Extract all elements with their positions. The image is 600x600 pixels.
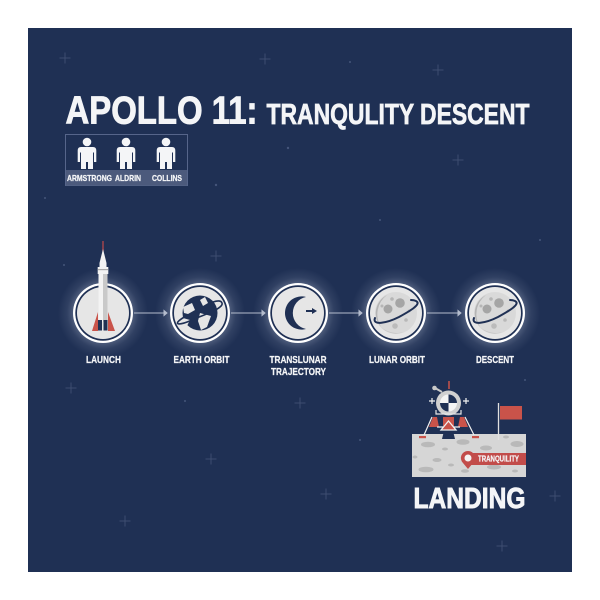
crew names: ARMSTRONG (67, 173, 112, 183)
crew names: ALDRIN (115, 173, 141, 183)
title: APOLLO 11: (66, 90, 258, 132)
title (66, 90, 530, 132)
arrow: earth orbit to translunar (231, 310, 265, 316)
step: lunar orbit (351, 268, 441, 366)
arrow: launch to earth orbit (134, 310, 167, 316)
step: translunar trajectory: TRAJECTORY (271, 366, 326, 378)
icon: astronaut Armstrong (78, 138, 96, 169)
step: descent (450, 268, 540, 366)
title: TRANQULITY DESCENT (266, 99, 530, 131)
icon: earth with orbit (177, 296, 222, 330)
label: EARTH ORBIT (174, 354, 230, 366)
step: launch (58, 241, 148, 366)
label: LAUNCH (86, 354, 121, 366)
icon: moon with orbit (474, 292, 517, 334)
label: TRANSLUNAR (270, 354, 327, 366)
icon: moon with orbit (375, 292, 418, 334)
label: DESCENT (476, 354, 514, 366)
arrow: lunar orbit to descent (427, 310, 461, 316)
label: LUNAR ORBIT (369, 354, 425, 366)
icon: astronaut Collins (157, 138, 175, 169)
landing scene (412, 381, 526, 515)
landing heading: LANDING (414, 483, 526, 515)
lunar surface (412, 434, 526, 477)
step: earth orbit (155, 268, 245, 366)
icon: astronaut Aldrin (117, 138, 135, 169)
icon: flag (498, 403, 522, 440)
icon: lunar module (419, 381, 479, 439)
crew names (67, 173, 182, 183)
star field (44, 52, 560, 552)
icon: crescent and arrow (285, 296, 317, 330)
icon: rocket (92, 241, 115, 331)
crew names: COLLINS (152, 173, 182, 183)
arrow: translunar to lunar orbit (329, 310, 362, 316)
step: translunar trajectory (253, 268, 343, 378)
callout: tranquility: TRANQUILITY (478, 454, 519, 464)
crew panel (66, 134, 188, 186)
